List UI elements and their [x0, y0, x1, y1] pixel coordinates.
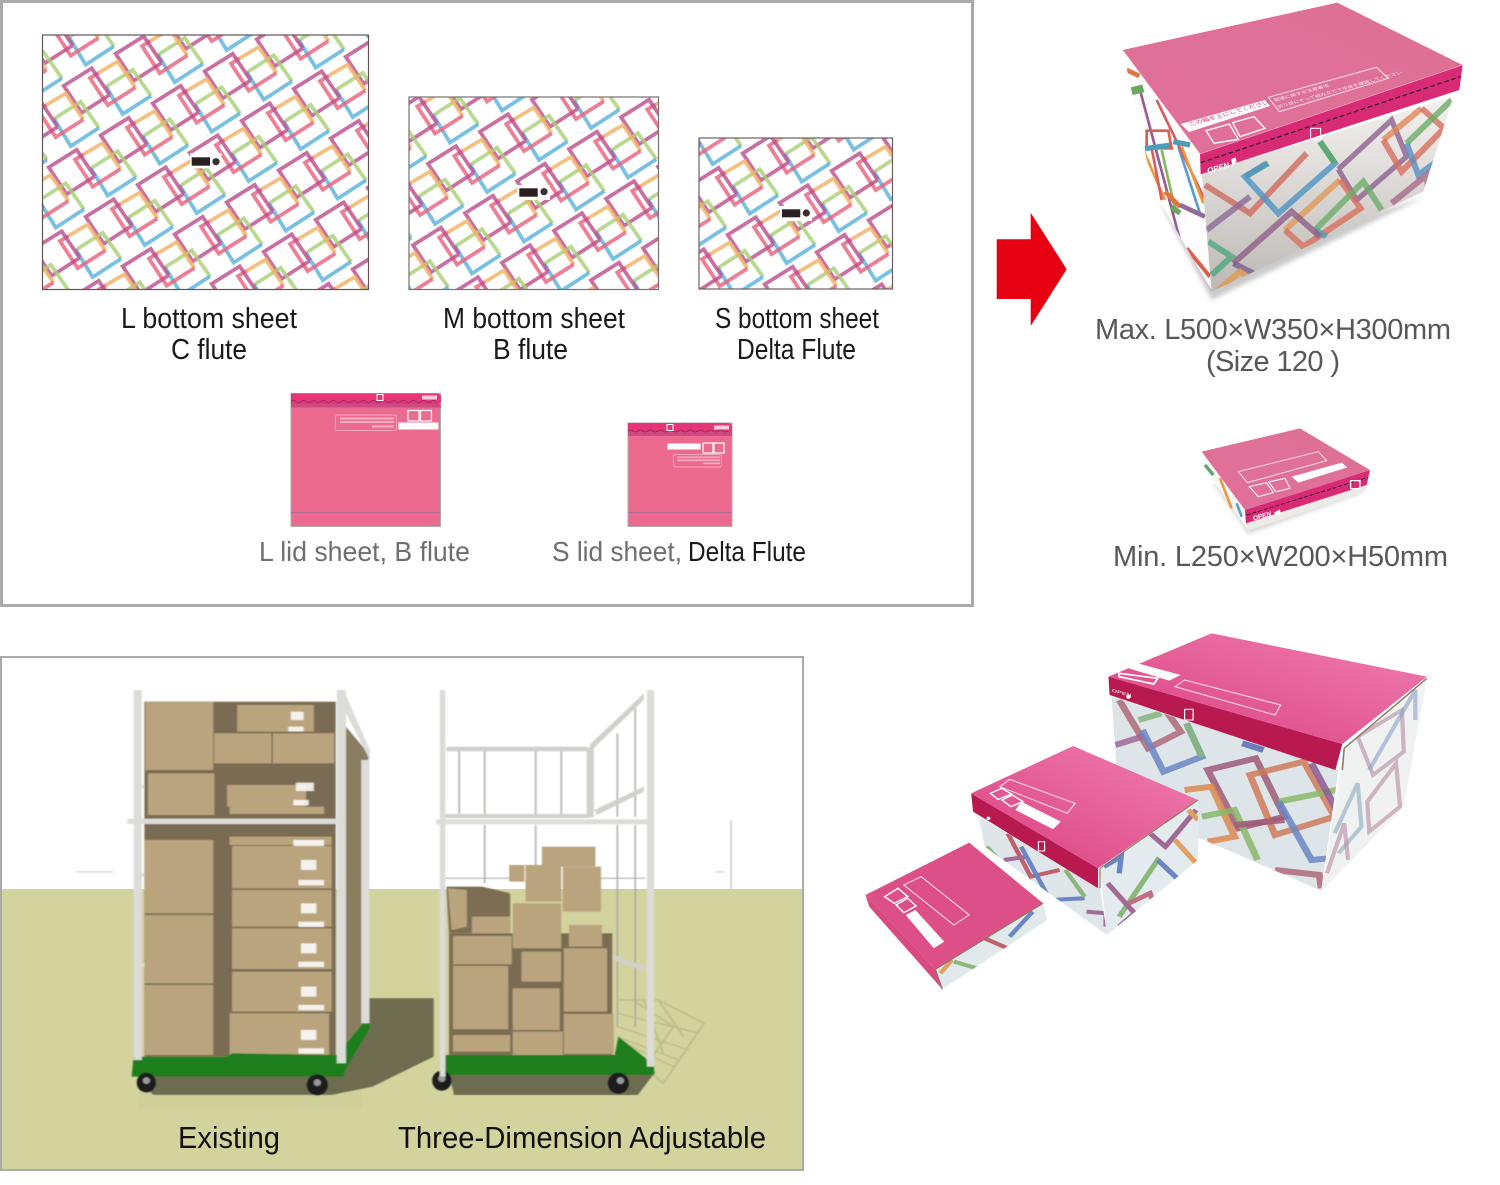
- L lid sheet: [291, 394, 441, 526]
- S lid sheet caption: [552, 536, 806, 567]
- three-dimension adjustable cage: [432, 690, 704, 1095]
- S bottom sheet pattern: [698, 137, 1340, 946]
- cart illustration group: [77, 690, 731, 1108]
- S lid sheet caption: Delta Flute: [688, 536, 806, 567]
- large box in photo: OPEN: [1111, 689, 1132, 698]
- three-dimension adjustable label: Three-Dimension Adjustable: [398, 1120, 766, 1155]
- L bottom sheet caption: L bottom sheet: [121, 303, 297, 335]
- M bottom sheet pattern: [408, 96, 660, 290]
- L bottom sheet pattern: [42, 34, 370, 290]
- existing cage: [128, 690, 434, 1096]
- S bottom sheet caption: Delta Flute: [737, 334, 856, 366]
- photo: three assembled boxes: [865, 633, 1427, 989]
- small box in photo: [865, 843, 1047, 989]
- max size caption: [1095, 314, 1451, 378]
- lid label: handling text: この箱を上にしてください: [1187, 99, 1271, 127]
- max size caption: (Size 120 ): [1206, 346, 1340, 378]
- min size caption: Min. L250×W200×H50mm: [1113, 541, 1448, 573]
- L bottom sheet caption: C flute: [171, 334, 247, 366]
- large assembled box: [1123, 3, 1463, 300]
- S bottom sheet caption: [715, 303, 879, 366]
- S lid sheet caption: S lid sheet,: [552, 536, 682, 567]
- M bottom sheet caption: M bottom sheet: [443, 303, 625, 335]
- L lid sheet caption: L lid sheet, B flute: [259, 536, 470, 567]
- L bottom sheet caption: [121, 303, 297, 366]
- lid label: handling text: [1181, 67, 1403, 143]
- S lid sheet: [628, 423, 732, 526]
- M bottom sheet caption: [443, 303, 625, 366]
- large box in photo: [1108, 633, 1427, 892]
- S bottom sheet caption: S bottom sheet: [715, 303, 879, 335]
- panel: roll cages: [1, 657, 803, 1170]
- panel: box sheets: [0, 0, 974, 607]
- lid label: handling text: 配達に関する注意事項: [1273, 83, 1330, 103]
- small assembled box: OPEN: [1253, 511, 1272, 523]
- max size caption: Max. L500×W350×H300mm: [1095, 314, 1451, 346]
- medium box in photo: [971, 746, 1198, 935]
- arrow: red right arrow: [997, 213, 1067, 326]
- large assembled box: OPEN: [1207, 160, 1230, 176]
- M bottom sheet caption: B flute: [493, 334, 568, 366]
- lid label: handling text: 折り目にそって組み立てて中身を確認してください: [1276, 70, 1403, 110]
- existing label: Existing: [178, 1120, 280, 1155]
- small assembled box: [1202, 428, 1370, 534]
